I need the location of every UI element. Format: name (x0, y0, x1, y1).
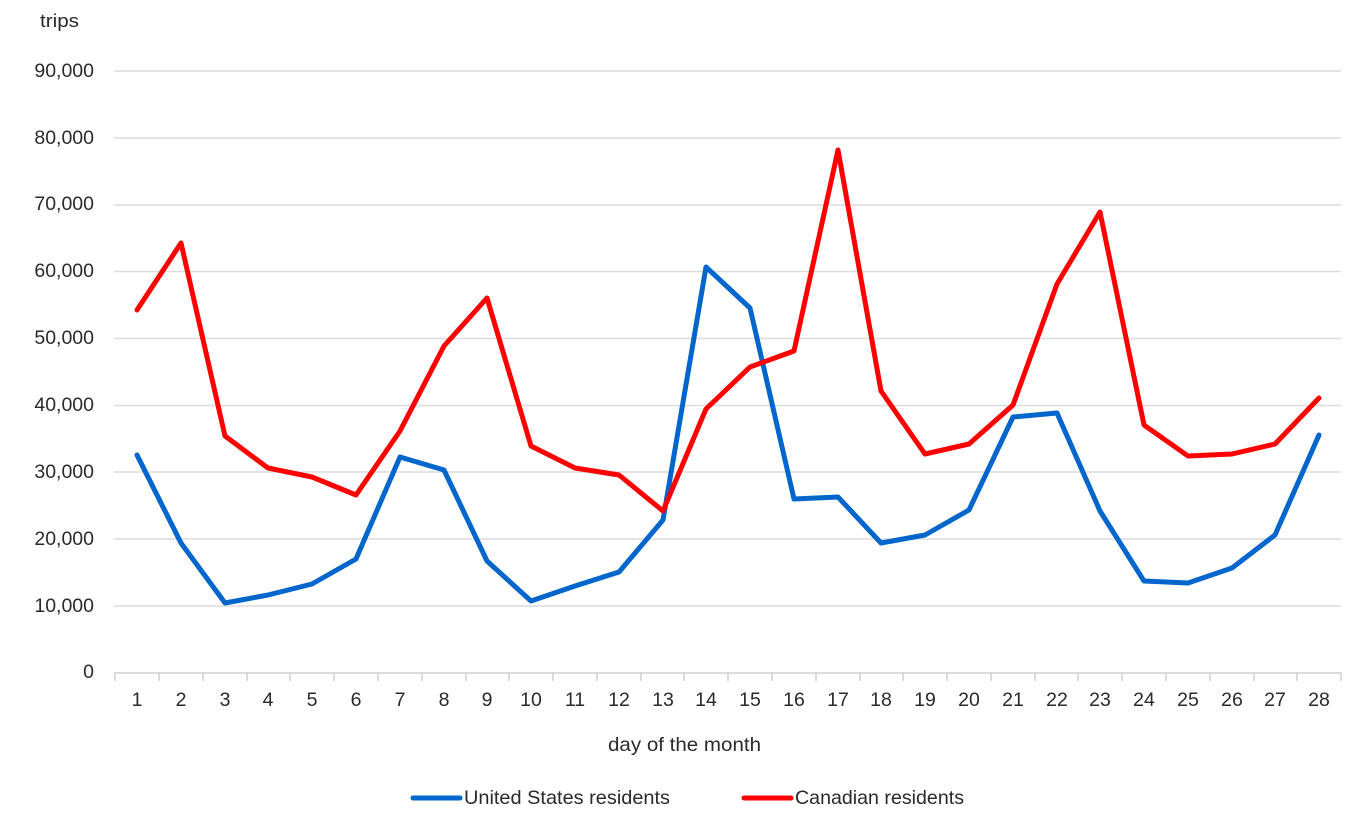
x axis labels: 18 (870, 689, 892, 711)
x axis labels: 21 (1002, 689, 1024, 711)
x axis line with ticks (114, 673, 1341, 681)
x axis title: day of the month (608, 734, 761, 756)
x axis labels: 5 (307, 689, 318, 711)
series: Canadian residents (137, 150, 1319, 511)
x axis labels: 10 (520, 689, 542, 711)
y axis labels: 40,000 (34, 394, 94, 416)
x axis labels: 17 (827, 689, 849, 711)
x axis labels: 28 (1308, 689, 1330, 711)
y axis labels: 60,000 (34, 260, 94, 282)
x axis labels: 15 (739, 689, 761, 711)
x axis labels: 14 (695, 689, 717, 711)
x axis labels: 1 (132, 689, 142, 711)
x axis labels: 25 (1177, 689, 1199, 711)
x axis labels: 9 (482, 689, 492, 711)
x axis labels: 3 (220, 689, 230, 711)
y axis labels: 30,000 (34, 461, 94, 483)
x axis labels: 7 (395, 689, 405, 711)
y axis labels: 50,000 (34, 327, 94, 349)
x axis labels: 27 (1264, 689, 1286, 711)
x axis labels (132, 689, 1330, 711)
y axis labels: 20,000 (34, 528, 94, 550)
y axis labels: 70,000 (34, 193, 94, 215)
legend item: United States residents: United States residents (464, 787, 670, 809)
x axis labels: 26 (1221, 689, 1243, 711)
y axis labels (34, 60, 94, 683)
series: United States residents (137, 267, 1319, 603)
y axis labels: 0 (83, 661, 94, 683)
y axis labels: 80,000 (34, 127, 94, 149)
x axis labels: 6 (351, 689, 361, 711)
x axis labels: 22 (1046, 689, 1068, 711)
x axis labels: 24 (1133, 689, 1155, 711)
y axis title: trips (40, 11, 79, 31)
x axis labels: 19 (914, 689, 936, 711)
y axis labels: 90,000 (34, 60, 94, 82)
x axis labels: 23 (1089, 689, 1111, 711)
legend item: Canadian residents: Canadian residents (795, 787, 964, 809)
y axis labels: 10,000 (34, 595, 94, 617)
x axis labels: 20 (958, 689, 980, 711)
x axis labels: 8 (439, 689, 449, 711)
x axis labels: 4 (263, 689, 274, 711)
legend (413, 787, 964, 809)
x axis labels: 2 (176, 689, 186, 711)
x axis labels: 11 (565, 689, 585, 711)
x axis labels: 16 (783, 689, 805, 711)
x axis labels: 12 (608, 689, 630, 711)
gridlines (114, 71, 1341, 606)
x axis labels: 13 (652, 689, 674, 711)
